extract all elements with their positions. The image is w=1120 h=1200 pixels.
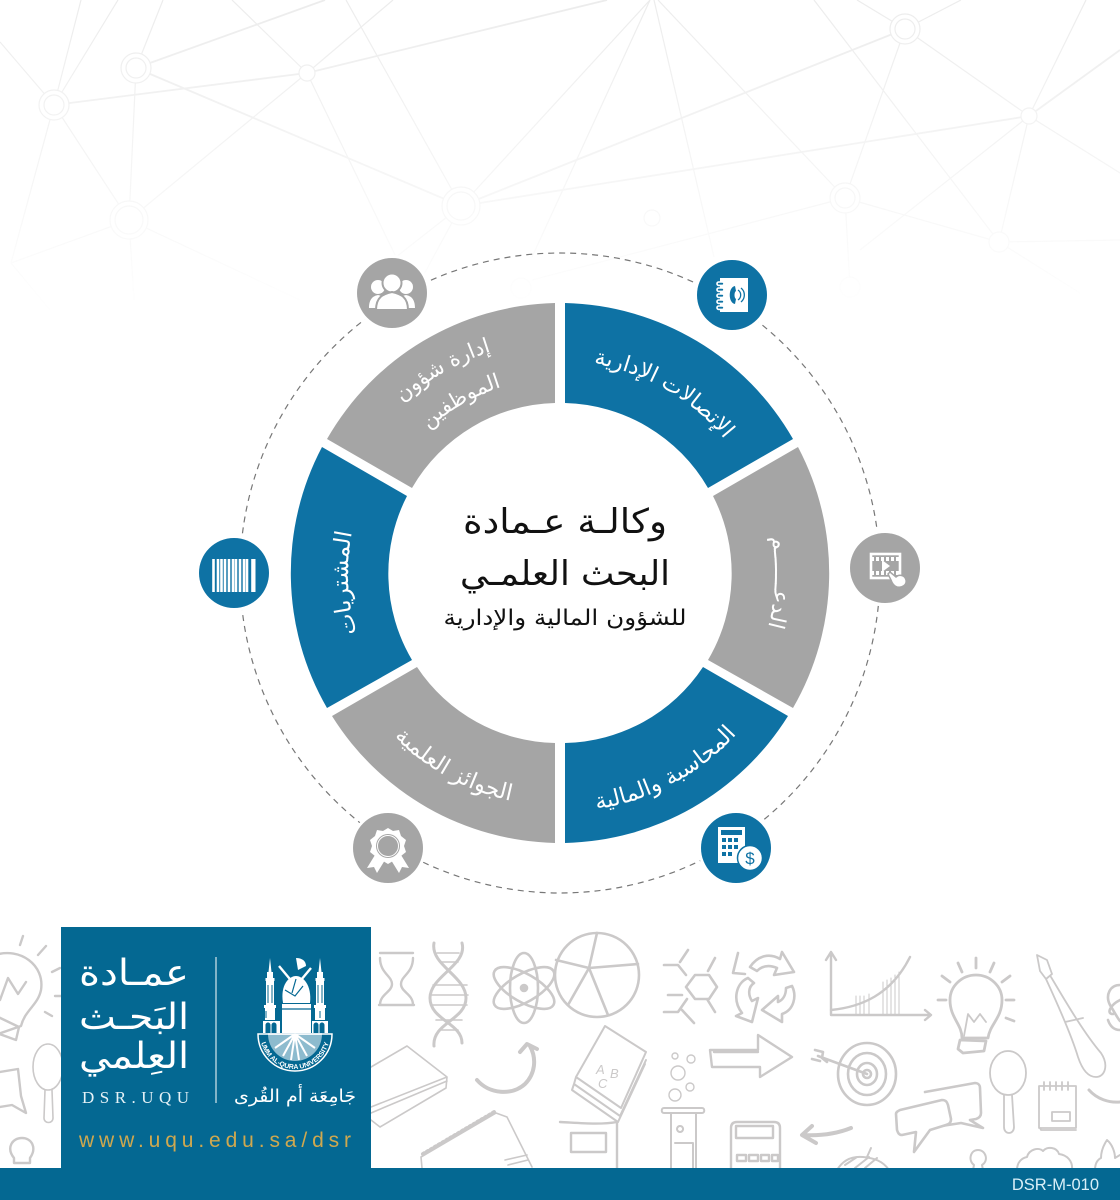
- doodle: left magnifier: [33, 1044, 63, 1122]
- doodle: hourglass: [379, 953, 414, 1005]
- doodle: left speech bubble: [0, 1069, 26, 1113]
- footer band: [0, 1168, 1120, 1200]
- doodle: curved arrow: [477, 1044, 537, 1092]
- doodle: right atom: [1108, 985, 1120, 1030]
- segment: personnel affairs: [327, 303, 555, 488]
- doodle: bottom shapes: [971, 1140, 1120, 1170]
- deanship name: [79, 953, 189, 1077]
- doodle: left notebook: [560, 1122, 617, 1170]
- icon: barcode: [196, 535, 272, 611]
- center title: [444, 502, 686, 631]
- doodle: alphabet book: A: [595, 1062, 605, 1077]
- doodle: flask: [662, 1108, 704, 1168]
- deanship name: عمـادة: [79, 953, 189, 994]
- DSR.UQU: DSR.UQU: [82, 1088, 189, 1107]
- doodle: book stack: [371, 1046, 447, 1127]
- center title: للشؤون المالية والإدارية: [444, 606, 686, 631]
- segment: right grey: [708, 447, 830, 708]
- deanship name: العِلمي: [79, 1036, 189, 1077]
- segment: purchases: المشتريات: [332, 531, 356, 633]
- segment: scientific awards: الجوائز العلمية: [396, 731, 512, 800]
- icon: calculator and dollar: $: [745, 849, 755, 868]
- doodle: pie chart: [555, 933, 639, 1017]
- website url: www.uqu.edu.sa/dsr: [78, 1129, 351, 1152]
- document code: DSR-M-010: [1012, 1176, 1099, 1194]
- doodle: right light bulb: [938, 958, 1014, 1053]
- doodle: alphabet book: B: [610, 1066, 619, 1081]
- doodle: DNA: [430, 943, 468, 1046]
- doodle: right magnifier: [990, 1051, 1026, 1133]
- doodle: alphabet book: C: [598, 1076, 608, 1091]
- center title: وكالـة عـمادة: [463, 502, 667, 542]
- doodle: calculator: [731, 1122, 780, 1170]
- icon: people: [354, 255, 430, 331]
- doodle: spiral notebook: [421, 1111, 532, 1168]
- icon: award badge: [350, 810, 426, 886]
- doodle: apple: [837, 1148, 889, 1170]
- center title: البحث العلمـي: [460, 554, 670, 594]
- segment: personnel affairs: الموظفين: [428, 372, 500, 430]
- doodle: fountain pen: [1037, 955, 1105, 1077]
- university name: جَامِعَة أم القُرى: [234, 1084, 356, 1107]
- icon: calculator and dollar: [698, 810, 774, 886]
- doodle: chart: [826, 952, 931, 1020]
- segment: accounting and finance: [565, 667, 788, 843]
- doodle: hexagons: [664, 950, 717, 1023]
- segment: right grey: الدعــــــم: [767, 538, 787, 629]
- emblem seal: [258, 1034, 332, 1071]
- segment: scientific awards: [332, 667, 555, 843]
- logo panel: [61, 927, 371, 1168]
- university emblem: [257, 958, 333, 1072]
- icon: phone book: [694, 257, 770, 333]
- segment: accounting and finance: المحاسبة والمالية: [597, 724, 736, 810]
- minarets and kaaba: [264, 958, 276, 1020]
- doodle: stamp: [10, 1138, 33, 1163]
- doodle: small arrow: [802, 1126, 851, 1143]
- doodle: chat bubbles: [896, 1083, 983, 1152]
- university emblem: UMM AL-QURA UNIVERSITY: [262, 1042, 328, 1069]
- segment: administrative communications: [565, 303, 793, 488]
- deanship name: البَحـث: [79, 997, 189, 1038]
- doodle: outlined arrow: [710, 1035, 792, 1077]
- segment: personnel affairs: إدارة شؤون: [400, 336, 492, 402]
- icon: video touch: [847, 530, 923, 606]
- background: science doodles: [0, 933, 1120, 1170]
- segment: purchases: [290, 447, 412, 708]
- doodle: atom: [488, 953, 560, 1023]
- doodle: notepad: [1039, 1082, 1076, 1130]
- doodle: left light bulb: [0, 936, 62, 1040]
- ring diagram: [290, 303, 830, 843]
- doodle: recycle arrows: [733, 952, 794, 1022]
- segment: administrative communications: الإتصالات الإدارية: [596, 353, 736, 438]
- background: network pattern: [0, 0, 1120, 310]
- doodle: bubbles: [669, 1053, 695, 1101]
- doodle: alphabet book: [572, 1026, 646, 1122]
- doodle: target: [812, 1043, 896, 1105]
- doodle: right arc: [1089, 1090, 1120, 1102]
- dashed orbit circle: [240, 253, 880, 893]
